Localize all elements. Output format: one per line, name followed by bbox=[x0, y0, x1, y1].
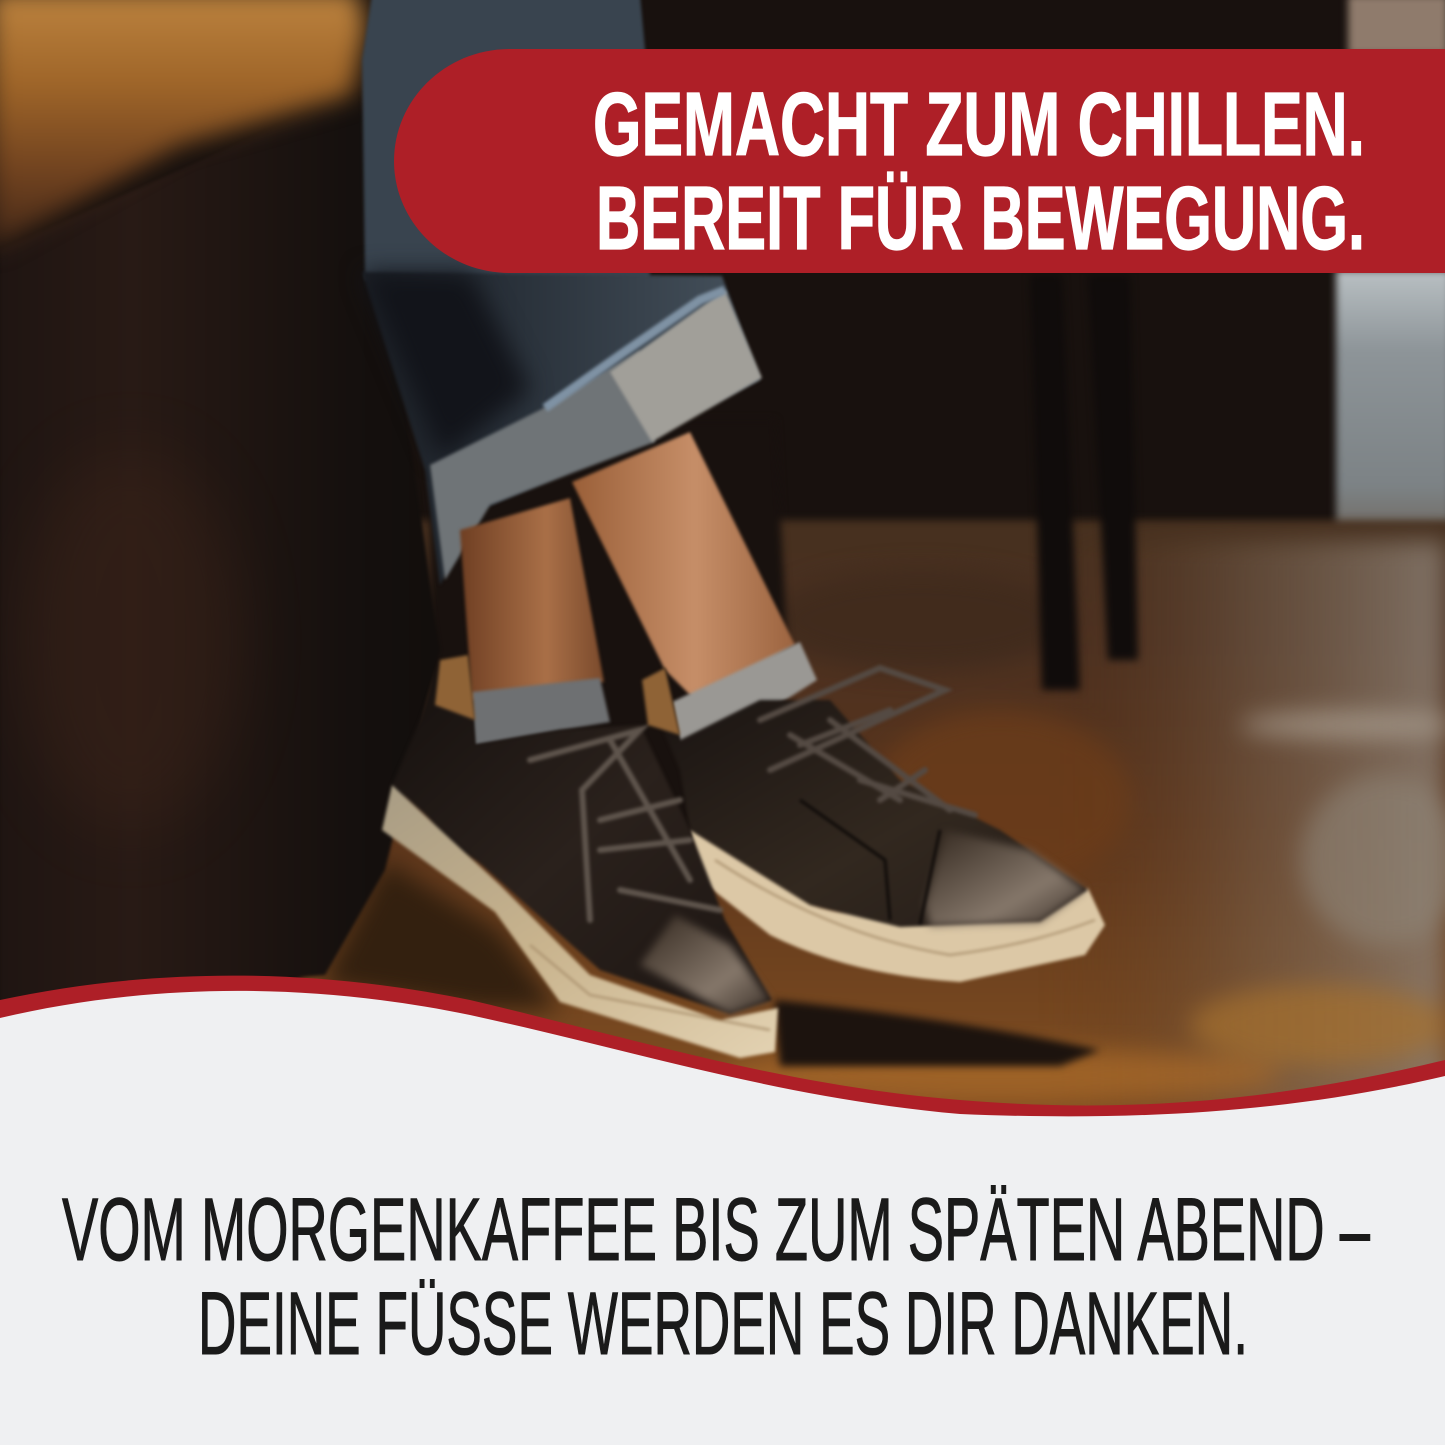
jeans upper leg bbox=[362, 0, 650, 280]
jeans cuff light bbox=[610, 290, 762, 442]
left heel patch bbox=[435, 655, 475, 720]
right shoe sole bbox=[690, 830, 1105, 982]
right shoe seam bbox=[800, 800, 940, 925]
jeans lower leg bbox=[362, 272, 760, 585]
floor bbox=[300, 520, 1445, 1130]
dark floor under left shoe bbox=[320, 860, 560, 1010]
socks bbox=[472, 678, 610, 745]
orange bench bbox=[0, 0, 366, 250]
left shoe shadow on floor bbox=[775, 1000, 1100, 1066]
right sneaker bbox=[642, 668, 1105, 982]
left wall bbox=[0, 90, 440, 1005]
bottom text block bbox=[62, 1179, 1370, 1373]
left shoe laces bbox=[530, 730, 720, 920]
photo background: bright doorway at right bbox=[1336, 0, 1445, 540]
top red banner bbox=[394, 49, 1445, 273]
heading bbox=[593, 75, 1365, 269]
left shoe toe highlight bbox=[640, 915, 770, 1014]
left shoe sole edge bbox=[530, 945, 770, 1030]
wall glow bbox=[20, 450, 240, 830]
left sneaker bbox=[382, 655, 778, 1058]
back leg bbox=[460, 498, 604, 700]
right heel patch bbox=[642, 668, 680, 735]
right shoe sole edge bbox=[715, 860, 1095, 955]
front leg bbox=[572, 432, 795, 705]
floor reflection bbox=[720, 540, 1445, 1120]
jeans frayed edge bbox=[545, 290, 725, 408]
jeans cuff bbox=[430, 350, 655, 580]
chair legs bbox=[1030, 275, 1138, 690]
left shoe sole bbox=[382, 785, 778, 1058]
right shoe upper bbox=[642, 668, 1088, 927]
dark area behind legs bbox=[430, 420, 790, 860]
left shoe upper bbox=[392, 660, 772, 1014]
jeans shadow bbox=[362, 272, 530, 460]
right shoe toe highlight bbox=[925, 830, 1085, 926]
bottom light panel bbox=[0, 991, 1445, 1445]
photo background: dark interior bbox=[0, 0, 1445, 1120]
right shoe laces bbox=[760, 668, 975, 815]
bottom red wave bbox=[0, 976, 1445, 1445]
photo: legs and sneakers in a cafe bbox=[0, 0, 1445, 1130]
